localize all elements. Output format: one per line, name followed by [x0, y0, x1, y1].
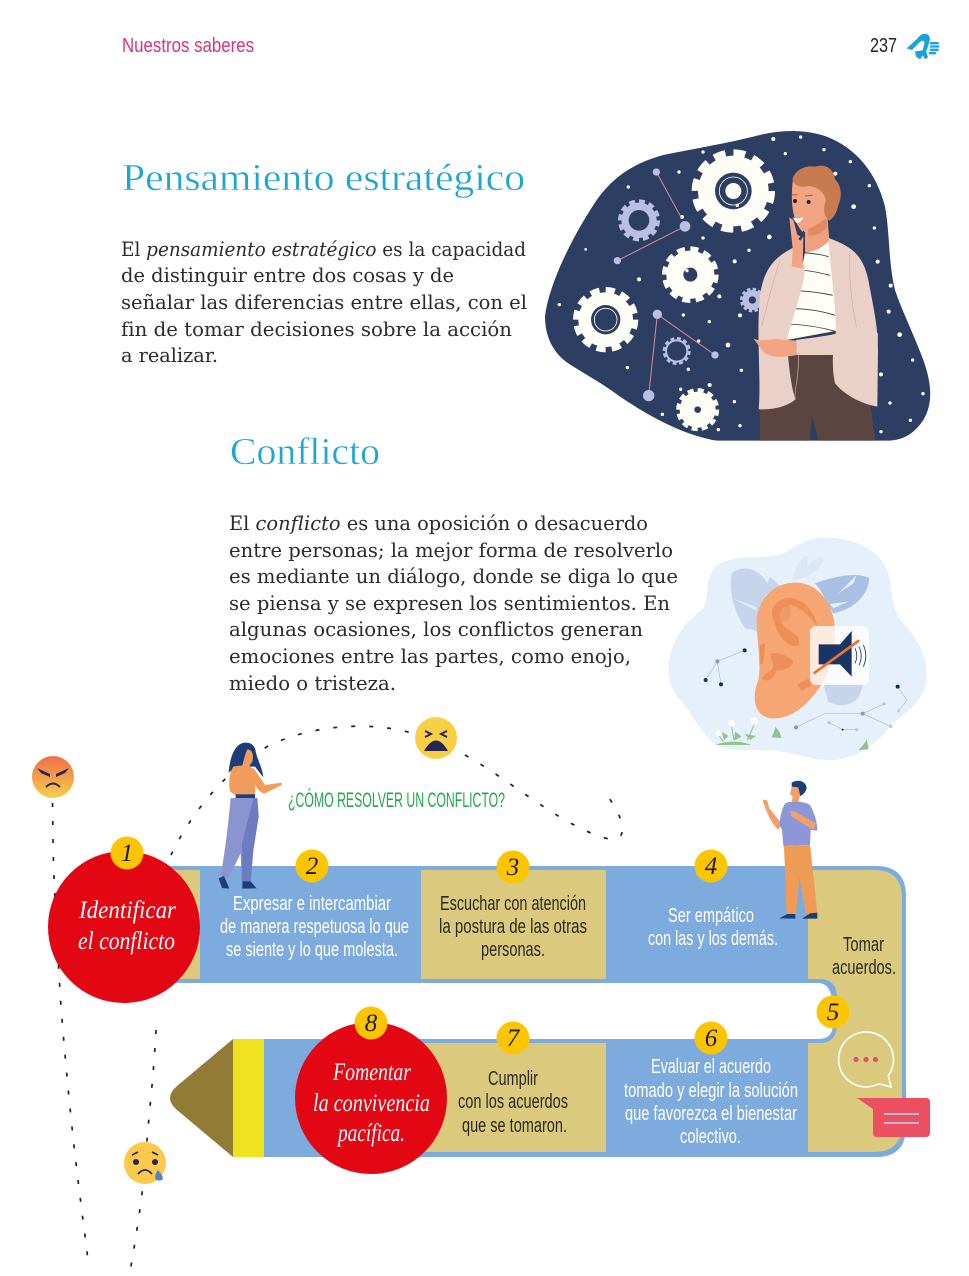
step 6 text: tomado y elegir la solución	[624, 1080, 798, 1102]
step 7 text: Cumplir	[488, 1068, 538, 1090]
shirt	[779, 802, 817, 846]
gear: white middle	[665, 249, 716, 300]
hair	[792, 166, 841, 221]
text block: definition of conflict: entre personas; la mejor forma de resolverlo	[229, 538, 673, 562]
badge 3	[496, 850, 530, 884]
step 8: circle Fomentar la convivencia pacífica	[295, 1022, 447, 1174]
ear inner folds	[759, 598, 817, 691]
step 5 text	[832, 934, 896, 979]
shoes	[219, 876, 257, 889]
icon: bird glyph	[907, 34, 939, 59]
header: page number: 237	[870, 35, 897, 57]
illustration: ear with muted speaker	[668, 537, 927, 760]
raised arm	[762, 799, 782, 830]
step 8: circle Fomentar la convivencia pacífica: pacífica.	[336, 1120, 405, 1147]
pencil tip	[170, 1039, 233, 1157]
illustration: thinking man with gears	[545, 131, 930, 441]
step 2 text: se siente y lo que molesta.	[226, 939, 398, 961]
step 3 panel	[421, 870, 606, 979]
beard shade	[808, 218, 827, 235]
title: Pensamiento estratégico: Pensamiento estratégico	[122, 157, 525, 199]
hair	[792, 781, 807, 796]
step 7 text	[458, 1068, 568, 1137]
muted speaker panel	[810, 626, 869, 685]
step 6 text: colectivo.	[680, 1126, 741, 1148]
badge 8	[354, 1006, 388, 1040]
step 3 text: personas.	[481, 939, 545, 961]
badge 2: 2	[306, 853, 318, 880]
face	[242, 749, 253, 767]
gear: large white	[695, 153, 771, 229]
cardigan left panel	[758, 247, 805, 409]
step 1: circle Identificar el conflicto: el conflicto	[78, 928, 175, 955]
emoji: sad with tear	[124, 1142, 166, 1184]
step 2 text: de manera respetuosa lo que	[220, 916, 409, 938]
step 6 text	[624, 1056, 798, 1148]
heading: how to resolve a conflict: ¿CÓMO RESOLVER UN CONFLICTO?	[288, 789, 505, 812]
speech bubble with dots	[839, 1032, 894, 1087]
step 1: circle Identificar el conflicto: Identificar	[78, 897, 176, 924]
cardigan right panel	[829, 238, 878, 407]
badge 7: 7	[507, 1025, 521, 1052]
text block: definition of conflict: emociones entre las partes, como enojo,	[229, 644, 631, 668]
step 7 text: que se tomaron.	[462, 1115, 567, 1137]
badge 4: 4	[705, 853, 717, 880]
ear	[755, 583, 835, 718]
badge 5	[816, 996, 850, 1028]
badge 1: 1	[121, 840, 133, 867]
step 6 text: que favorezca el bienestar	[625, 1103, 797, 1125]
step 2 text: Expresar e intercambiar	[233, 893, 391, 915]
red chat bubble with lines	[857, 1098, 930, 1137]
gear: white bottom	[678, 390, 717, 429]
step 3 text	[439, 893, 587, 961]
text block: definition of strategic thinking: a realizar.	[121, 343, 218, 367]
pencil ferrule	[233, 1039, 264, 1157]
step 5 text: Tomar	[843, 934, 884, 956]
emoji: tired	[415, 717, 457, 759]
raised hand	[789, 217, 803, 268]
torso and arm	[229, 766, 282, 795]
eyes and smile	[792, 195, 813, 223]
step 3 text: la postura de las otras	[439, 916, 587, 938]
text block: definition of strategic thinking: El pensamiento estratégico es la capacidad	[121, 237, 526, 261]
pencil blue body	[170, 866, 906, 1157]
step 8: circle Fomentar la convivencia pacífica: la convivencia	[313, 1090, 430, 1117]
gear: lilac ring	[664, 338, 689, 364]
step 5 panel	[808, 870, 902, 1152]
gear: lilac upper left	[620, 201, 658, 239]
gear: small lilac behind man	[741, 289, 763, 311]
shirt	[787, 241, 837, 340]
heading: Conflicto: Conflicto	[230, 431, 380, 473]
step 4 text: con las y los demás.	[648, 928, 778, 950]
text block: definition of strategic thinking: señalar las diferencias entre ellas, con el	[121, 290, 527, 314]
trousers	[784, 845, 817, 914]
step 6 text: Evaluar el acuerdo	[651, 1056, 771, 1078]
dotted path: top curve from step 1 to the right	[171, 726, 418, 855]
dotted path: left line from angry emoji	[52, 803, 89, 1268]
badge 2	[296, 850, 328, 882]
step 8: circle Fomentar la convivencia pacífica: Fomentar	[332, 1059, 411, 1086]
hair	[229, 743, 263, 777]
finger shadow	[798, 231, 805, 241]
dotted path: continuation right of tired emoji	[465, 755, 622, 839]
step 5 text: acuerdos.	[832, 957, 896, 979]
badge 7	[496, 1022, 530, 1054]
badge 1	[110, 836, 144, 870]
face	[790, 787, 800, 803]
legs	[221, 798, 259, 882]
pencil flow diagram	[170, 866, 906, 1157]
text block: definition of conflict: se piensa y se expresen los sentimientos. En	[229, 591, 670, 615]
stars	[558, 135, 925, 433]
text block: definition of conflict: El conflicto es una oposición o desacuerdo	[229, 511, 648, 535]
text block: definition of strategic thinking: fin de tomar decisiones sobre la acción	[121, 317, 512, 341]
badge 4	[694, 850, 728, 882]
neck	[805, 215, 829, 253]
forearm	[790, 811, 816, 830]
flowers and grass	[715, 717, 869, 750]
step 4 text: Ser empático	[668, 905, 754, 927]
cardigan seams	[762, 252, 857, 399]
step 2 text	[220, 893, 409, 961]
dotted path: line to sad emoji	[130, 1030, 156, 1272]
constellation nodes	[614, 168, 719, 401]
sleeve	[796, 327, 878, 355]
constellations	[704, 648, 907, 731]
step 7 text: con los acuerdos	[458, 1091, 568, 1113]
background leaves	[731, 556, 869, 705]
lower hand	[753, 338, 797, 357]
man figure	[753, 166, 878, 441]
man figure standing on the pencil	[762, 781, 817, 919]
badge 3: 3	[506, 854, 519, 881]
badge 8: 8	[365, 1010, 378, 1037]
badge 6	[694, 1022, 728, 1054]
trousers	[760, 347, 875, 441]
step 1: circle Identificar el conflicto	[48, 851, 200, 1003]
header: section name: Nuestros saberes	[122, 35, 254, 57]
shoes	[779, 913, 817, 919]
navy blob background	[545, 131, 930, 441]
text block: definition of strategic thinking	[121, 237, 527, 367]
text block: definition of conflict: es mediante un diálogo, donde se diga lo que	[229, 564, 678, 588]
belt	[236, 794, 255, 798]
text block: definition of conflict	[229, 511, 678, 695]
pale blue blob	[668, 537, 927, 760]
step 1 beige panel	[170, 870, 200, 979]
text block: definition of strategic thinking: de distinguir entre dos cosas y de	[121, 263, 454, 287]
badge 5: 5	[827, 999, 839, 1026]
emoji: angry	[32, 756, 74, 798]
step 7 panel	[420, 1043, 606, 1152]
face	[792, 182, 827, 234]
text block: definition of conflict: miedo o tristeza.	[229, 671, 396, 695]
text block: definition of conflict: algunas ocasiones, los conflictos generan	[229, 617, 643, 641]
gear: white left	[576, 290, 635, 349]
step 3 text: Escuchar con atención	[440, 893, 586, 915]
step 4 text	[648, 905, 778, 950]
woman figure standing on the pencil	[219, 743, 282, 889]
constellation lines	[617, 172, 715, 396]
badge 6: 6	[705, 1025, 718, 1052]
